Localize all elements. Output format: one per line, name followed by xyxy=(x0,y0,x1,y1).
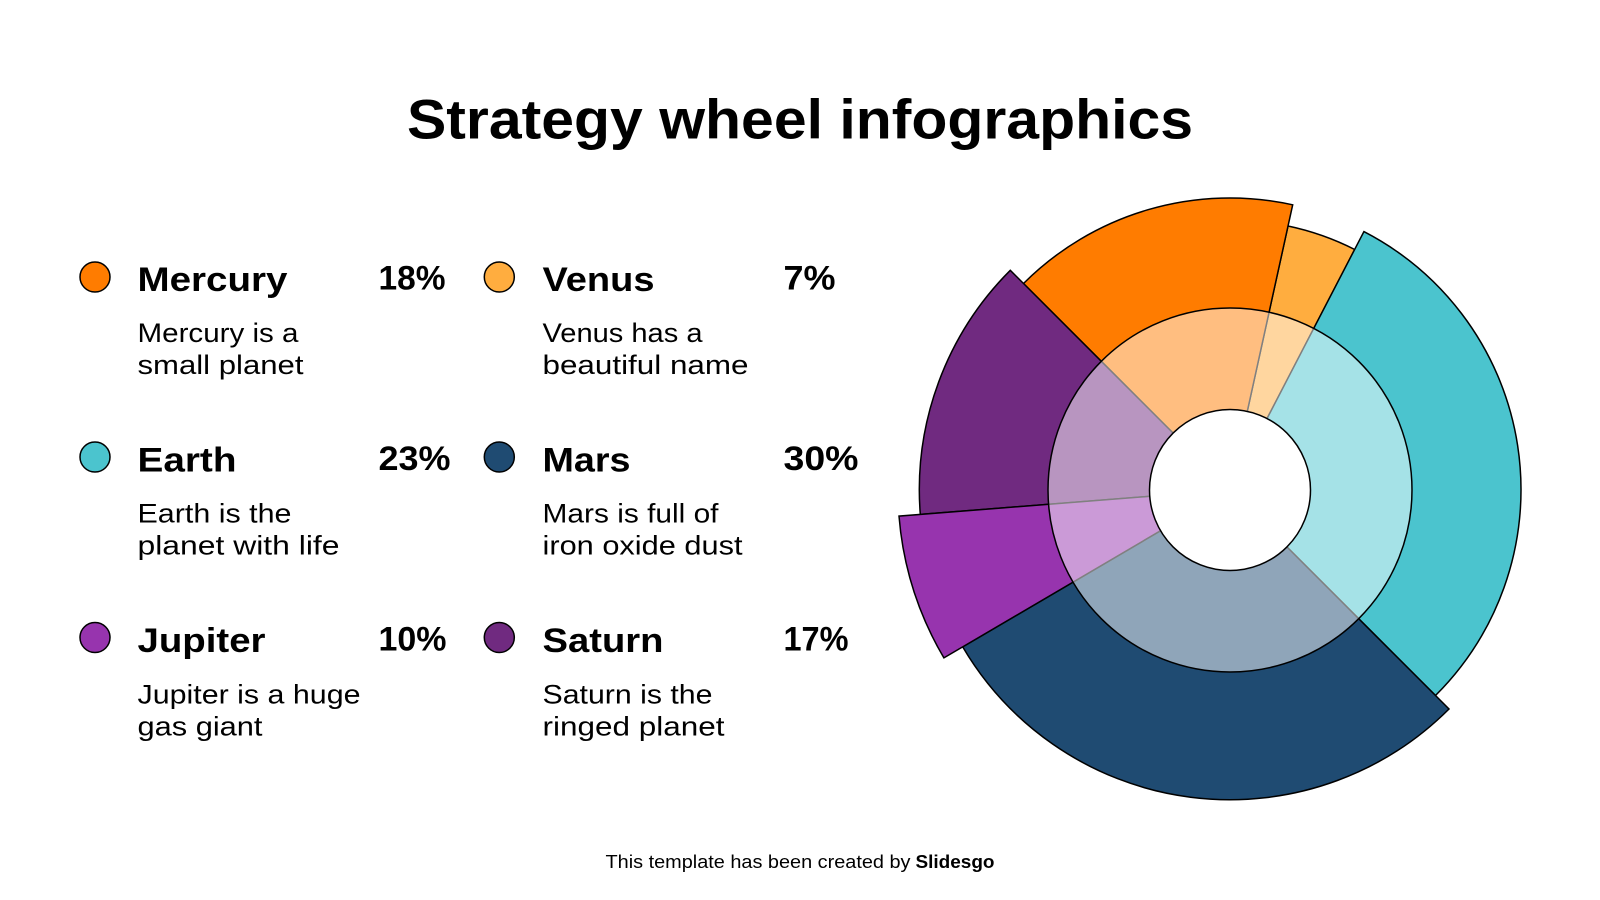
Venus description: beautiful name xyxy=(542,350,748,380)
Mercury description: small planet xyxy=(138,350,304,380)
translucent inner ring xyxy=(1048,308,1412,672)
Mercury description xyxy=(138,318,304,380)
Mercury name: Mercury xyxy=(138,261,288,299)
Earth description xyxy=(138,498,340,560)
Mars name: Mars xyxy=(542,442,630,480)
segment: Mercury xyxy=(1024,198,1293,490)
Saturn name: Saturn xyxy=(542,622,664,660)
Venus name: Venus xyxy=(542,261,654,299)
Saturn description xyxy=(542,680,725,742)
Earth name: Earth xyxy=(138,442,236,480)
Mercury description: Mercury is a xyxy=(138,318,300,348)
Mars description xyxy=(542,498,743,560)
legend: Earth xyxy=(80,440,450,560)
Saturn description: Saturn is the xyxy=(542,680,712,710)
icon: Earth dot xyxy=(80,442,110,472)
legend: Saturn xyxy=(484,620,848,742)
icon: Mars dot xyxy=(484,442,514,472)
legend: Mars xyxy=(484,440,858,560)
chart: strategy wheel xyxy=(899,198,1521,800)
Mars percent: 30% xyxy=(784,440,858,478)
segment: Venus xyxy=(1230,226,1355,490)
segment: Saturn xyxy=(919,270,1230,514)
segment: Jupiter xyxy=(899,490,1230,658)
Jupiter description xyxy=(138,680,360,742)
title: Strategy wheel infographics xyxy=(407,88,1193,150)
Jupiter description: gas giant xyxy=(138,712,263,742)
icon: Jupiter dot xyxy=(80,622,110,652)
Saturn description: ringed planet xyxy=(542,712,725,742)
segment: Earth xyxy=(1230,232,1521,696)
Venus description: Venus has a xyxy=(542,318,704,348)
center hole xyxy=(1150,410,1310,570)
Earth percent: 23% xyxy=(378,440,450,478)
footer credit: This template has been created by xyxy=(606,852,910,872)
icon: Venus dot xyxy=(484,262,514,292)
Venus percent: 7% xyxy=(784,260,836,298)
footer credit: Slidesgo xyxy=(916,852,995,872)
Mercury percent: 18% xyxy=(378,260,446,298)
Mars description: Mars is full of xyxy=(542,498,719,528)
segment: Mars xyxy=(963,490,1449,800)
Jupiter name: Jupiter xyxy=(138,622,266,660)
Saturn percent: 17% xyxy=(784,620,848,658)
Earth description: planet with life xyxy=(138,530,340,560)
Earth description: Earth is the xyxy=(138,498,292,528)
icon: Mercury dot xyxy=(80,262,110,292)
legend: Venus xyxy=(484,260,836,380)
Jupiter percent: 10% xyxy=(378,620,446,658)
Jupiter description: Jupiter is a huge xyxy=(138,680,360,710)
Mars description: iron oxide dust xyxy=(542,530,743,560)
icon: Saturn dot xyxy=(484,622,514,652)
legend: Jupiter xyxy=(80,620,446,742)
legend: Mercury xyxy=(80,260,446,380)
Venus description xyxy=(542,318,748,380)
